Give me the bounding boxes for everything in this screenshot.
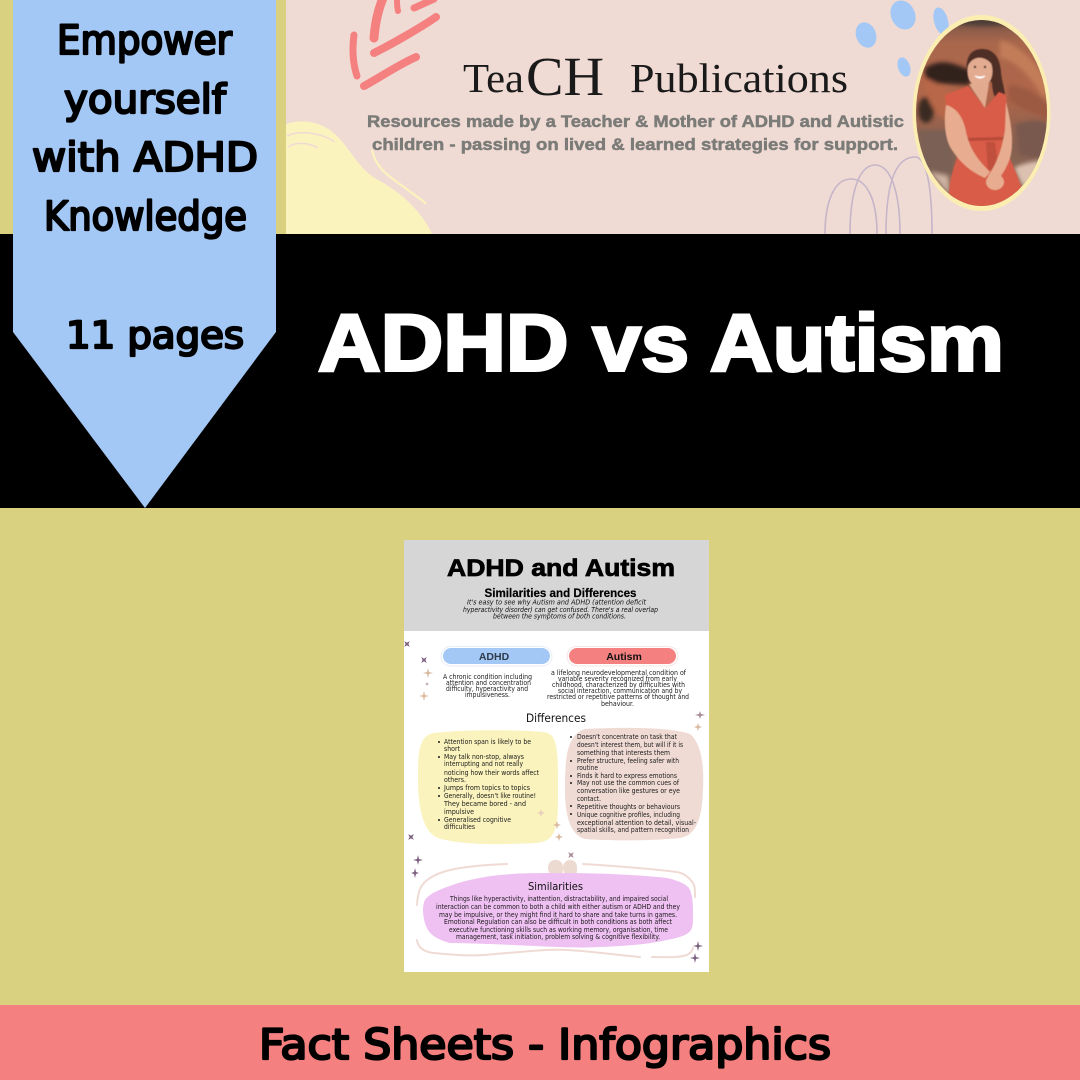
tag heading: with ADHD <box>32 135 258 181</box>
decoration: sparkles <box>401 638 705 963</box>
Differences heading: Differences <box>526 711 586 725</box>
similarities card: interaction can be common to both a child with either autism or ADHD and they <box>436 902 681 911</box>
similarities card <box>423 873 693 947</box>
decoration: blue drops <box>852 0 951 78</box>
Autism differences card: conversation like gestures or eye <box>577 786 680 795</box>
footer text: Fact Sheets - Infographics <box>259 1020 831 1069</box>
ADHD definition: impulsiveness. <box>465 690 510 699</box>
ADHD differences card: difficulties <box>444 822 475 831</box>
logo: TeaCH Publications <box>463 46 848 107</box>
Autism definition: variable severity recognized from early <box>558 674 678 683</box>
logo: TeaCH Publications: Tea <box>463 55 524 101</box>
similarities card: management, task initiation, problem solving & cognitive flexibility. <box>456 932 660 941</box>
ADHD differences card: others. <box>444 775 466 784</box>
panel: footer band <box>0 1005 1080 1080</box>
sheet header: ADHD and Autism <box>447 555 675 582</box>
Autism differences card: contact. <box>577 794 601 803</box>
Autism differences card: Repetitive thoughts or behaviours <box>577 802 680 811</box>
decoration: purple arcs <box>825 157 932 234</box>
similarities card: Things like hyperactivity, inattention, distractability, and impaired social <box>449 894 668 903</box>
ADHD differences card: impulsive <box>444 807 475 816</box>
Autism differences card: Unique cognitive profiles, including <box>577 810 680 819</box>
Autism pill: Autism <box>606 651 642 663</box>
sheet header: between the symptoms of both conditions. <box>493 612 626 620</box>
ADHD definition: difficulty, hyperactivity and <box>446 684 528 693</box>
Autism definition: social interaction, communication and by <box>558 686 683 695</box>
sheet header: Similarities and Differences <box>484 588 636 600</box>
sheet header: hyperactivity disorder) can get confused. There's a real overlap <box>463 605 658 614</box>
ADHD differences card: Attention span is likely to be <box>444 737 531 746</box>
ADHD differences card: Generalised cognitive <box>444 815 511 824</box>
sheet header <box>404 540 709 631</box>
similarities card: Emotional Regulation can also be difficult in both conditions as both affect <box>444 917 672 926</box>
tagline: Resources made by a Teacher & Mother of ADHD and Autistic <box>367 112 904 131</box>
Autism differences card: Prefer structure, feeling safer with <box>577 756 679 765</box>
similarities frame outline <box>417 864 695 957</box>
page count: 11 pages <box>66 314 244 357</box>
Autism differences card: routine <box>577 763 598 772</box>
panel: top banner <box>286 0 1080 234</box>
similarities card: may be impulsive, or they might find it hard to share and take turns in games. <box>439 910 677 919</box>
Autism differences card: something that interests them <box>577 748 670 757</box>
similarities card: executive functioning skills such as working memory, organisation, time <box>449 925 668 934</box>
decoration: yellow blob <box>286 121 432 234</box>
ADHD differences card: Generally, doesn't like routine! <box>444 791 536 800</box>
ADHD definition <box>443 672 532 699</box>
ADHD differences card: short <box>444 744 460 753</box>
Autism definition <box>547 668 689 708</box>
Autism definition: behaviour. <box>601 699 634 708</box>
ADHD differences card: They became bored - and <box>443 799 526 808</box>
Autism definition: restricted or repetitive patterns of thought and <box>547 692 689 701</box>
Autism definition: a lifelong neurodevelopmental condition of <box>551 668 686 677</box>
Autism differences card: May not use the common cues of <box>577 778 679 787</box>
ADHD pill: ADHD <box>479 651 510 663</box>
tagline: children - passing on lived & learned strategies for support. <box>372 135 898 154</box>
ADHD definition: A chronic condition including <box>443 672 532 681</box>
Autism differences card: exceptional attention to detail, visual- <box>577 818 696 827</box>
tag heading: Empower <box>57 18 233 64</box>
ADHD differences card: noticing how their words affect <box>444 768 539 777</box>
panel: blue arrow tag <box>13 0 276 508</box>
ADHD differences card: May talk non-stop, always <box>444 752 524 761</box>
tagline <box>367 112 904 154</box>
Autism pill <box>567 646 678 666</box>
logo: TeaCH Publications: CH <box>526 46 604 107</box>
decoration: coral leaf strokes <box>353 0 436 86</box>
Autism differences card: Finds it hard to express emotions <box>577 771 677 780</box>
icon: quotation marks <box>548 860 577 882</box>
Autism differences card: Doesn't concentrate on task that <box>577 732 677 741</box>
Autism differences card <box>565 728 703 840</box>
panel: black title band <box>0 234 1080 508</box>
ADHD differences card <box>418 730 558 844</box>
tag heading: Knowledge <box>44 194 247 240</box>
ADHD pill <box>441 646 552 666</box>
logo: TeaCH Publications: Publications <box>630 55 848 101</box>
sheet header: It's easy to see why Autism and ADHD (attention deficit <box>467 598 647 606</box>
title: ADHD vs Autism <box>318 298 1004 388</box>
Autism differences card: spatial skills, and pattern recognition <box>577 825 689 834</box>
tag heading: yourself <box>64 77 227 123</box>
Autism differences card: doesn't interest them, but will if it is <box>577 740 683 749</box>
ADHD differences card: interrupting and not really <box>444 759 524 768</box>
photo: author portrait <box>910 14 1055 215</box>
similarities card: Similarities <box>528 880 583 893</box>
tag heading <box>32 18 258 240</box>
Autism definition: childhood, characterized by difficulties with <box>552 680 685 689</box>
ADHD differences card: Jumps from topics to topics <box>443 783 530 792</box>
panel: fact sheet preview <box>401 540 709 972</box>
ADHD definition: attention and concentration <box>446 678 531 687</box>
